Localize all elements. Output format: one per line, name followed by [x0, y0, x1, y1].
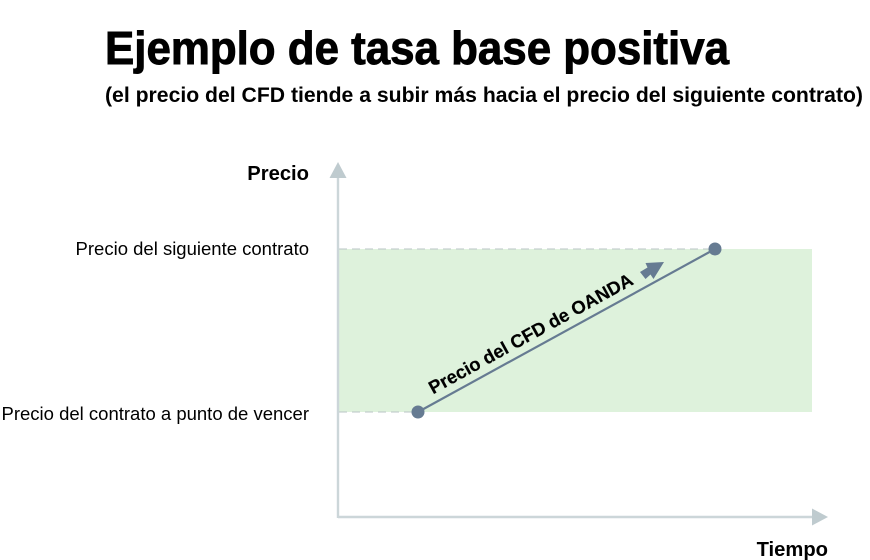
y axis with arrow	[330, 162, 346, 518]
rotated label: OANDA CFD price: Precio del CFD de OANDA	[425, 269, 636, 398]
dashed guide: expiring contract price	[339, 411, 415, 413]
CFD price line with end points	[412, 242, 722, 418]
x axis with arrow	[338, 508, 828, 526]
title: Ejemplo de tasa base positiva	[105, 22, 729, 74]
y axis label: Precio	[247, 163, 309, 185]
green price range band	[339, 249, 812, 412]
icon: upward arrow	[640, 262, 664, 279]
dashed guide: next contract price	[339, 248, 712, 250]
label: expiring contract price: Precio del contrato a punto de vencer	[2, 403, 309, 424]
subtitle: (el precio del CFD tiende a subir más hacia el precio del siguiente contrato)	[105, 84, 863, 107]
label: next contract price: Precio del siguiente contrato	[76, 238, 309, 259]
